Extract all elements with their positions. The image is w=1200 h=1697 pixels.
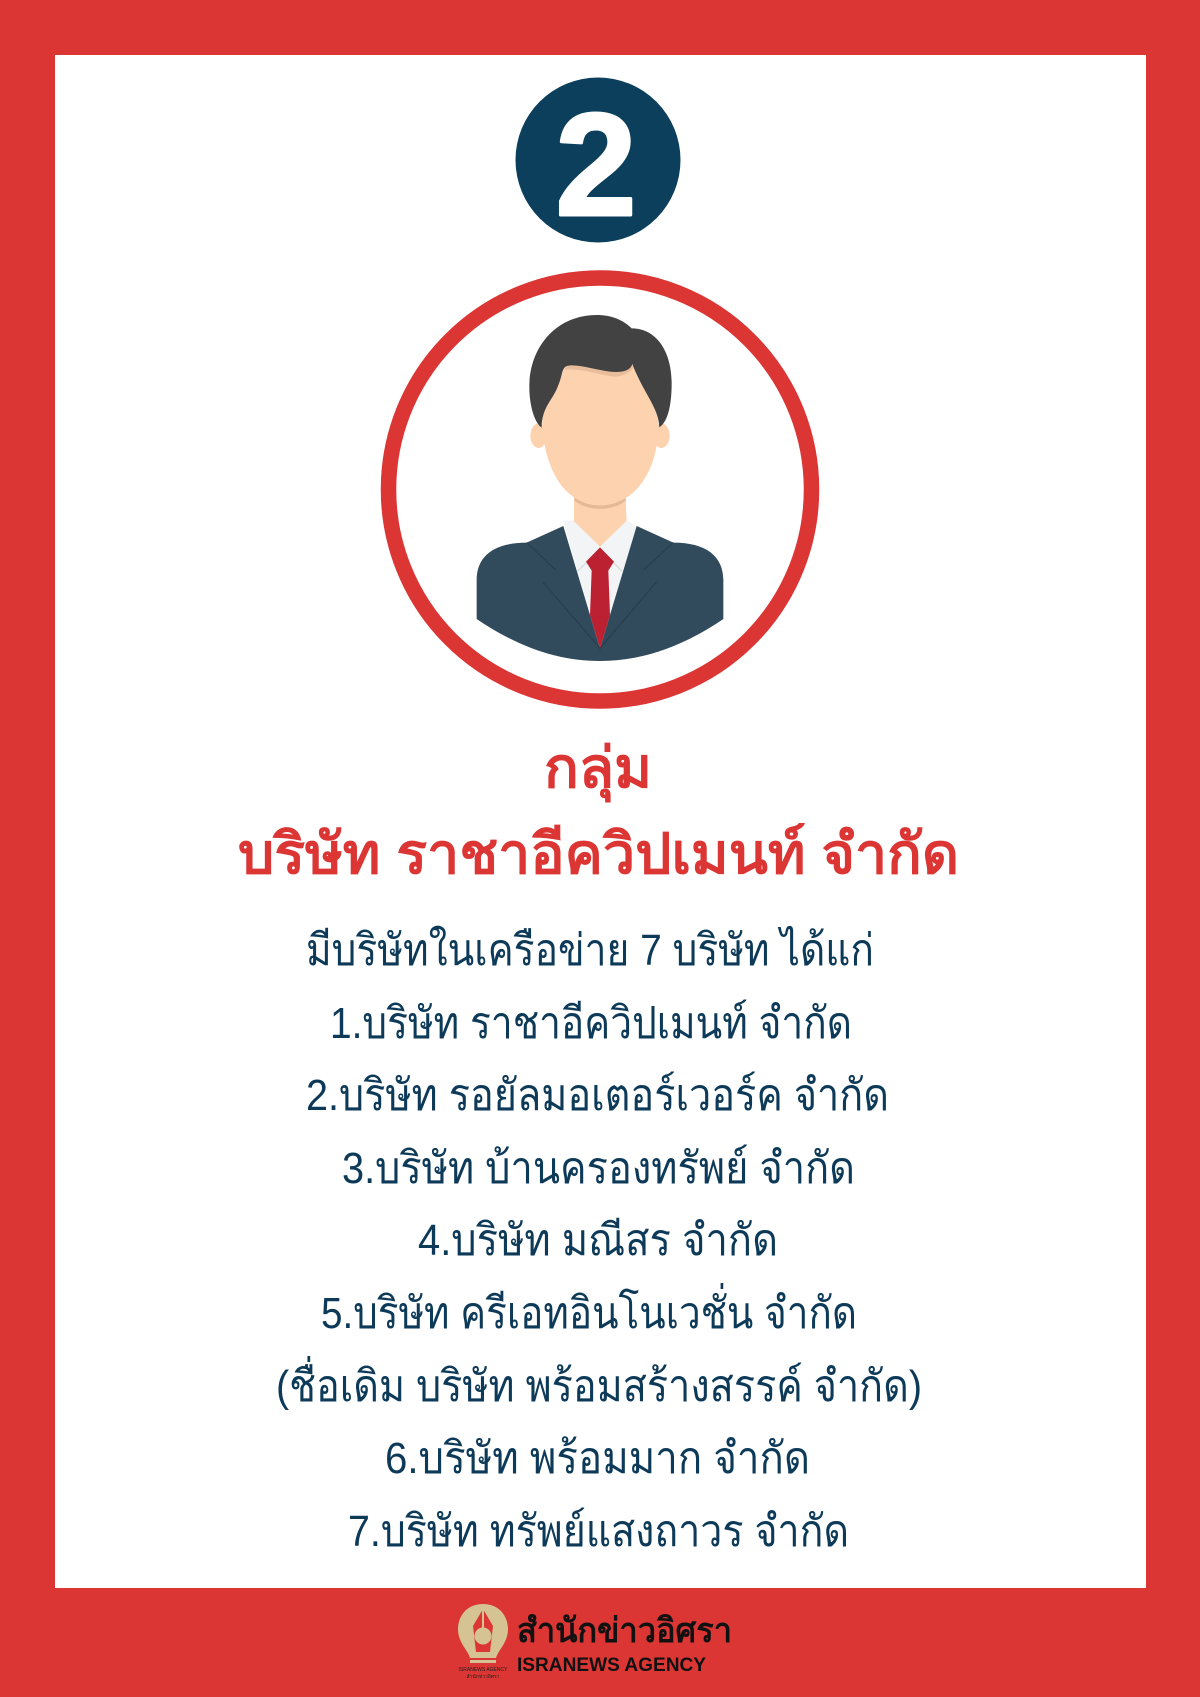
icon: suit jacket bbox=[477, 526, 723, 661]
icon: neck bbox=[574, 493, 627, 547]
list item 7: 7.บริษัท ทรัพย์แสงถาวร จำกัด bbox=[348, 1507, 849, 1556]
heading: company name: บริษัท ราชาอีควิปเมนท์ จำกัด bbox=[238, 822, 959, 885]
footer logo: Isranews Agency bbox=[458, 1604, 732, 1680]
list item 4: 4.บริษัท มณีสร จำกัด bbox=[418, 1216, 778, 1265]
list item 1: 1.บริษัท ราชาอีควิปเมนท์ จำกัด bbox=[330, 999, 852, 1048]
icon: ears bbox=[530, 423, 670, 448]
icon: neck shadow bbox=[575, 499, 625, 507]
list item 5 former name: (ชื่อเดิม บริษัท พร้อมสร้างสรรค์ จำกัด) bbox=[276, 1355, 922, 1411]
icon: hair bbox=[529, 315, 672, 428]
icon: red ring with businessman avatar bbox=[388, 278, 812, 701]
heading: group: กลุ่ม bbox=[544, 736, 652, 803]
icon: shirt bbox=[563, 521, 637, 648]
icon: face bbox=[542, 365, 658, 505]
list item 2: 2.บริษัท รอยัลมอเตอร์เวอร์ค จำกัด bbox=[306, 1071, 889, 1120]
list item 3: 3.บริษัท บ้านครองทรัพย์ จำกัด bbox=[342, 1144, 855, 1193]
number badge bbox=[516, 78, 680, 246]
icon: collar folds bbox=[577, 562, 622, 571]
list item 5: 5.บริษัท ครีเอทอินโนเวชั่น จำกัด bbox=[321, 1282, 857, 1338]
icon: pen nib bulb emblem: สำนักข่าวอิศรา bbox=[466, 1673, 500, 1680]
icon: tie bbox=[586, 547, 614, 648]
number badge: 2 bbox=[555, 83, 637, 246]
icon: lapel lines bbox=[527, 543, 673, 648]
company list text bbox=[276, 925, 922, 1556]
icon: pen nib bulb emblem: ISRANEWS AGENCY bbox=[459, 1667, 508, 1673]
logo text: Thai name: สำนักข่าวอิศรา bbox=[517, 1612, 732, 1650]
list item 6: 6.บริษัท พร้อมมาก จำกัด bbox=[385, 1434, 810, 1483]
logo text: English name: ISRANEWS AGENCY bbox=[517, 1655, 706, 1676]
icon: hairline shadow bbox=[564, 364, 633, 377]
icon: pen nib bulb emblem bbox=[458, 1604, 508, 1680]
intro line: มีบริษัทในเครือข่าย 7 บริษัท ได้แก่ bbox=[306, 925, 874, 975]
